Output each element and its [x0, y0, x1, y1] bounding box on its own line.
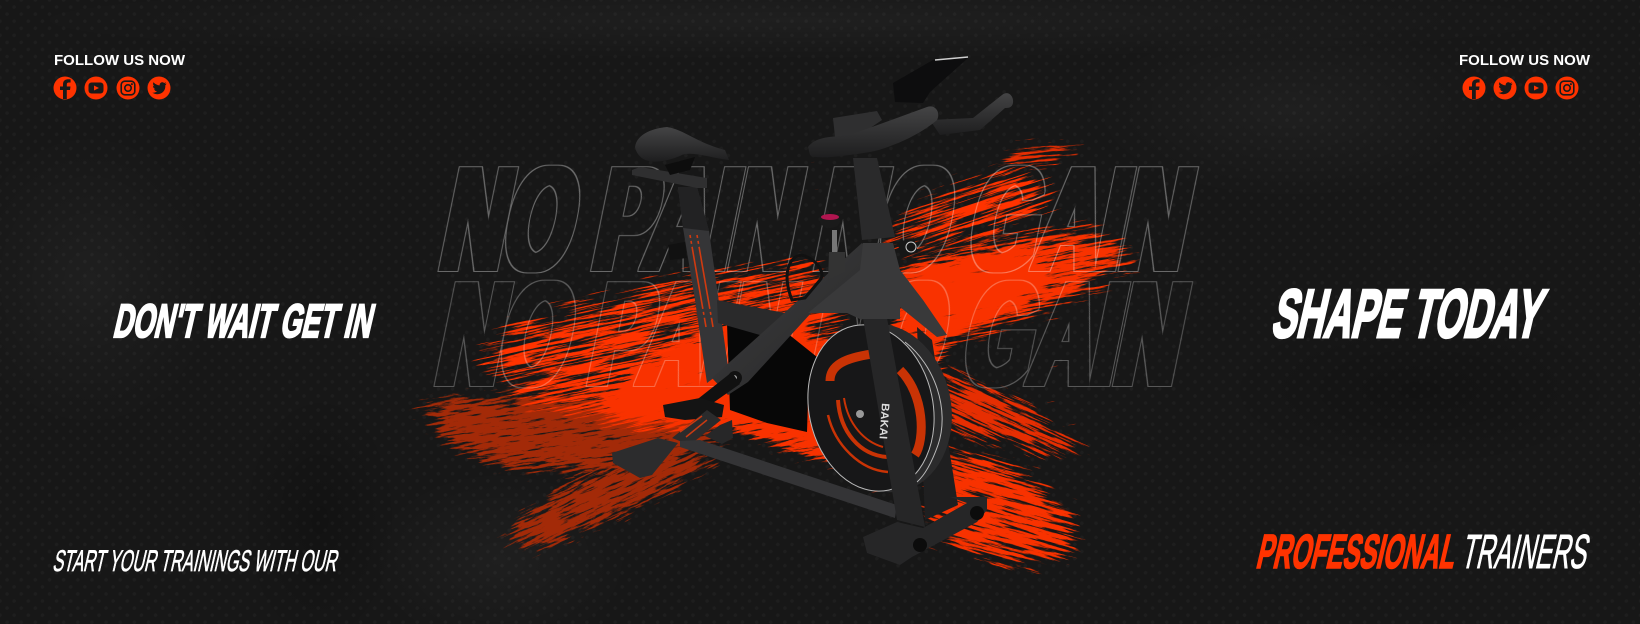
chain guard [727, 323, 817, 432]
seat post [678, 187, 728, 383]
tagline right: orange word: PROFESSIONAL [1252, 526, 1463, 579]
icon: youtube [84, 76, 108, 100]
splash: upper left streaks [409, 162, 901, 528]
icon: youtube [1524, 76, 1548, 100]
flywheel face [793, 313, 949, 503]
splash: upper right streaks [844, 104, 1096, 321]
splash: right core solid [878, 217, 1077, 373]
tagline left: START YOUR TRAININGS WITH OUR [50, 544, 342, 578]
brand label: BAKAI [876, 403, 891, 440]
follow block right [1459, 53, 1590, 100]
base rail [680, 440, 897, 518]
icon: twitter [1494, 76, 1516, 100]
wheel rear [970, 506, 984, 520]
crank [728, 371, 742, 385]
seat post markings [690, 235, 713, 327]
rear support leg [917, 327, 958, 520]
handlebar stem [853, 158, 895, 240]
icon: facebook [54, 76, 76, 100]
flywheel hub [856, 410, 864, 418]
seat clamp [632, 167, 707, 188]
pedal arm [694, 372, 740, 412]
pedal [663, 398, 724, 420]
knob dial [906, 242, 916, 252]
paint splash [393, 104, 1178, 624]
icon: facebook [1462, 76, 1486, 100]
rear foot [612, 438, 678, 478]
flywheel red arcs [828, 354, 921, 472]
icon: instagram [116, 76, 140, 100]
rim highlight [905, 342, 942, 482]
splash: lower right streaks [890, 286, 1165, 537]
main diagonal tube [712, 243, 882, 395]
handlebar rear extension [930, 93, 1013, 135]
splash: left dim lobe [393, 341, 757, 525]
icon: twitter [148, 76, 170, 100]
lower frame leg [672, 410, 721, 445]
saddle [635, 127, 729, 162]
seat post upper shade [678, 187, 709, 231]
seat knob [668, 242, 687, 260]
rear bracket [705, 420, 733, 444]
saddle bracket [665, 157, 695, 175]
flywheel rim [801, 311, 967, 505]
leg stripes [680, 416, 707, 437]
horizontal frame [717, 300, 785, 337]
follow heading left: FOLLOW US NOW [54, 53, 185, 69]
wheel [913, 538, 927, 552]
bottle cage [787, 255, 822, 300]
console knob [897, 238, 918, 258]
splash: top right wisps [951, 118, 1122, 193]
tablet highlight [935, 57, 968, 60]
splash: solid centre [558, 249, 837, 476]
follow heading right: FOLLOW US NOW [1459, 53, 1590, 69]
front fork [863, 318, 925, 527]
exercise bike [612, 57, 1013, 565]
front foot [863, 497, 987, 565]
resistance knob [820, 214, 845, 280]
headline left: DON'T WAIT GET IN [109, 296, 380, 348]
splash: behind flywheel [672, 282, 978, 533]
tray [833, 111, 882, 137]
crank bolt [731, 375, 737, 381]
splash: lower right block [884, 395, 1126, 620]
tablet holder [893, 58, 968, 103]
head shroud [808, 243, 947, 337]
splash: right core [862, 172, 1178, 401]
splash: lower dim lobe [447, 347, 783, 624]
icon: instagram [1556, 76, 1578, 100]
handlebar [808, 106, 938, 157]
follow block left [54, 53, 185, 100]
